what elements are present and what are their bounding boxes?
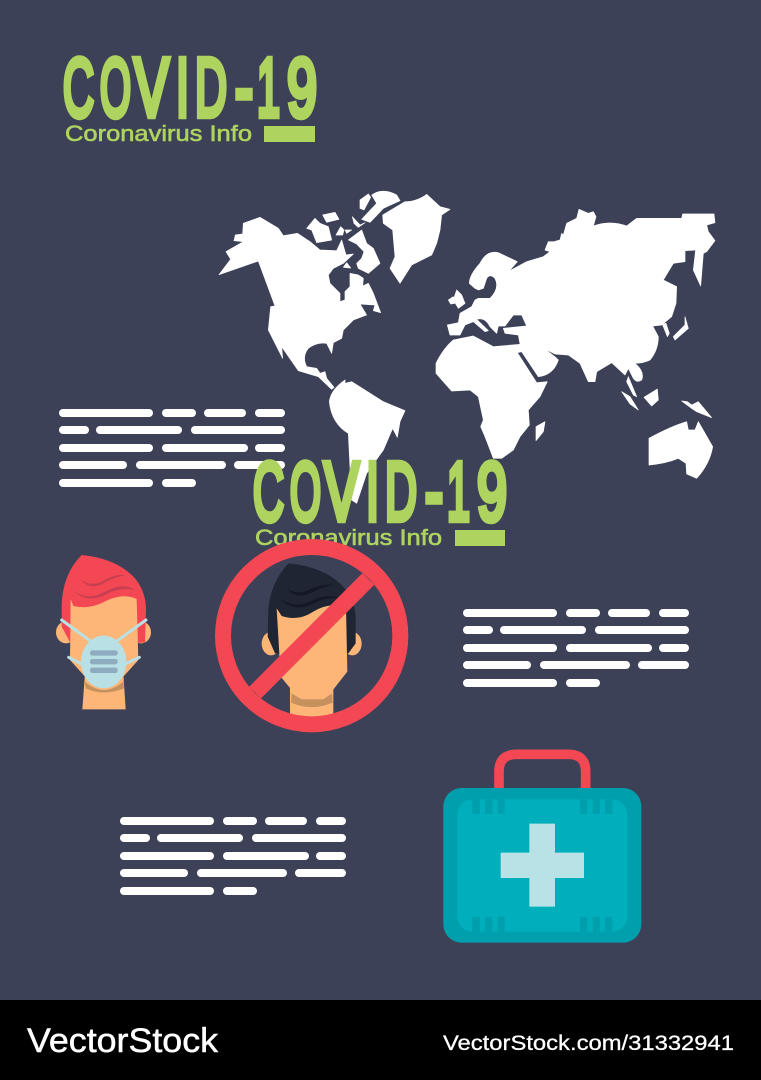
text block placeholder: left — [59, 409, 285, 487]
watermark footer bar — [0, 1000, 761, 1080]
heading: COVID-19: V — [324, 445, 359, 538]
heading: COVID-19: C — [63, 41, 94, 134]
heading: COVID-19: 1 — [257, 41, 280, 134]
map: Europe, Asia, Africa and Oceania — [436, 209, 715, 478]
icon: person wearing mask — [56, 555, 151, 709]
heading: COVID-19: D — [385, 445, 417, 538]
prohibition sign — [223, 547, 400, 724]
heading: COVID-19: I — [366, 445, 379, 538]
icon: prohibited unmasked person — [223, 547, 400, 724]
heading: COVID-19: - — [425, 445, 443, 538]
heading: COVID-19: 1 — [447, 445, 470, 538]
image reference: VectorStock.com/31332941 — [443, 1031, 734, 1055]
heading: COVID-19: C — [253, 445, 284, 538]
heading: COVID-19: V — [134, 41, 169, 134]
heading: COVID-19: I — [176, 41, 189, 134]
title: top logo — [63, 41, 317, 146]
subheading: Coronavirus Info: Coronavirus Info — [255, 525, 442, 550]
heading: COVID-19: 9 — [477, 445, 507, 538]
heading: COVID-19: - — [235, 41, 253, 134]
text block placeholder: right — [463, 609, 689, 687]
subheading: Coronavirus Info: Coronavirus Info — [65, 121, 252, 146]
icon: first aid kit — [443, 754, 641, 943]
heading: COVID-19: O — [290, 445, 321, 538]
title: centre logo — [253, 445, 507, 550]
world map — [219, 191, 715, 503]
text block placeholder: bottom — [120, 817, 346, 895]
accent bar — [264, 126, 315, 142]
map: Americas and Greenland — [219, 191, 450, 503]
medical cross — [501, 824, 584, 907]
brand name: VectorStock — [27, 1022, 219, 1060]
heading: COVID-19: 9 — [287, 41, 317, 134]
accent bar — [455, 530, 505, 546]
heading: COVID-19: O — [100, 41, 131, 134]
heading: COVID-19: D — [195, 41, 227, 134]
